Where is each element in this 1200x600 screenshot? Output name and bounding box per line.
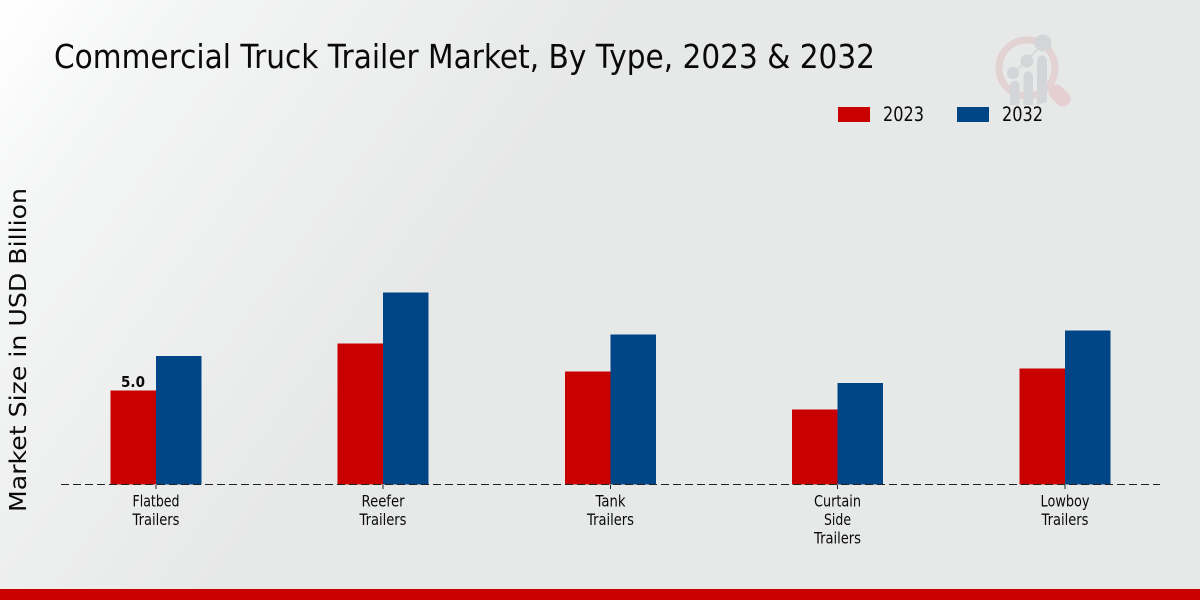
- label: Curtain Side Trailers: Side: [824, 510, 851, 529]
- label: Flatbed Trailers: Trailers: [132, 510, 180, 529]
- icon: watermark logo: [999, 34, 1063, 105]
- label: Lowboy Trailers: Trailers: [1041, 510, 1088, 529]
- footer band: [0, 589, 1200, 600]
- label: Reefer Trailers: [359, 492, 406, 529]
- label: Flatbed Trailers: [132, 492, 180, 529]
- group: Reefer Trailers: [338, 292, 428, 484]
- label: Tank Trailers: Tank: [595, 492, 626, 510]
- label: Lowboy Trailers: Lowboy: [1040, 492, 1090, 510]
- x axis: [61, 484, 1160, 489]
- group: Lowboy Trailers: [1020, 330, 1110, 484]
- legend: 2032: [957, 103, 1043, 126]
- group: Tank Trailers: [565, 334, 656, 484]
- legend: 2023: [838, 103, 924, 126]
- label: Curtain Side Trailers: [813, 492, 861, 548]
- label: Lowboy Trailers: [1040, 492, 1090, 529]
- y axis label: Market Size in USD Billion: [6, 188, 32, 512]
- legend: 2032: 2032: [1002, 103, 1043, 126]
- group: Flatbed Trailers: [110, 356, 202, 484]
- label: Reefer Trailers: Trailers: [359, 510, 406, 529]
- bar chart: [61, 292, 1160, 548]
- label: Reefer Trailers: Reefer: [362, 492, 405, 510]
- value label: 5.0: [121, 373, 145, 391]
- label: Tank Trailers: [586, 492, 634, 529]
- legend: 2023: 2023: [883, 103, 924, 126]
- label: Curtain Side Trailers: Curtain: [814, 492, 861, 510]
- title: Commercial Truck Trailer Market, By Type, 2023 & 2032: [54, 37, 875, 76]
- label: Flatbed Trailers: Flatbed: [132, 492, 180, 510]
- label: Curtain Side Trailers: Trailers: [813, 528, 861, 548]
- category labels: [132, 492, 1090, 548]
- legend: [838, 103, 1043, 126]
- group: Curtain Side Trailers: [792, 383, 883, 484]
- label: Tank Trailers: Trailers: [586, 510, 634, 529]
